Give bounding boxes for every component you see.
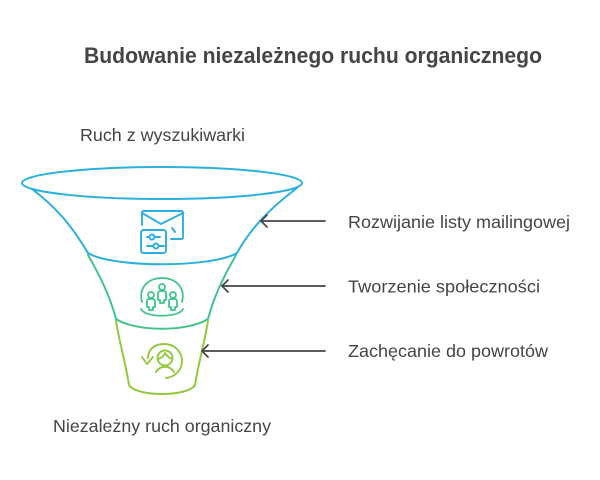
arrow: returning visits xyxy=(202,345,325,357)
funnel xyxy=(22,167,302,394)
funnel segment: community xyxy=(88,255,236,329)
label: community: Tworzenie społeczności xyxy=(348,276,540,296)
funnel segment: returning visits xyxy=(116,321,208,394)
icon: envelope and settings xyxy=(141,211,183,253)
icon: community xyxy=(141,278,183,316)
icon: returning person xyxy=(142,344,182,378)
label: mailing list: Rozwijanie listy mailingowej xyxy=(348,212,570,232)
arrow: community xyxy=(222,280,325,292)
bottom label: Niezależny ruch organiczny xyxy=(53,416,271,436)
label: returning visits: Zachęcanie do powrotów xyxy=(348,341,548,361)
top label: Ruch z wyszukiwarki xyxy=(80,125,245,145)
title: Budowanie niezależnego ruchu organicznego xyxy=(84,43,542,68)
arrow: mailing list xyxy=(261,215,325,227)
funnel segment: mailing list xyxy=(22,167,302,264)
